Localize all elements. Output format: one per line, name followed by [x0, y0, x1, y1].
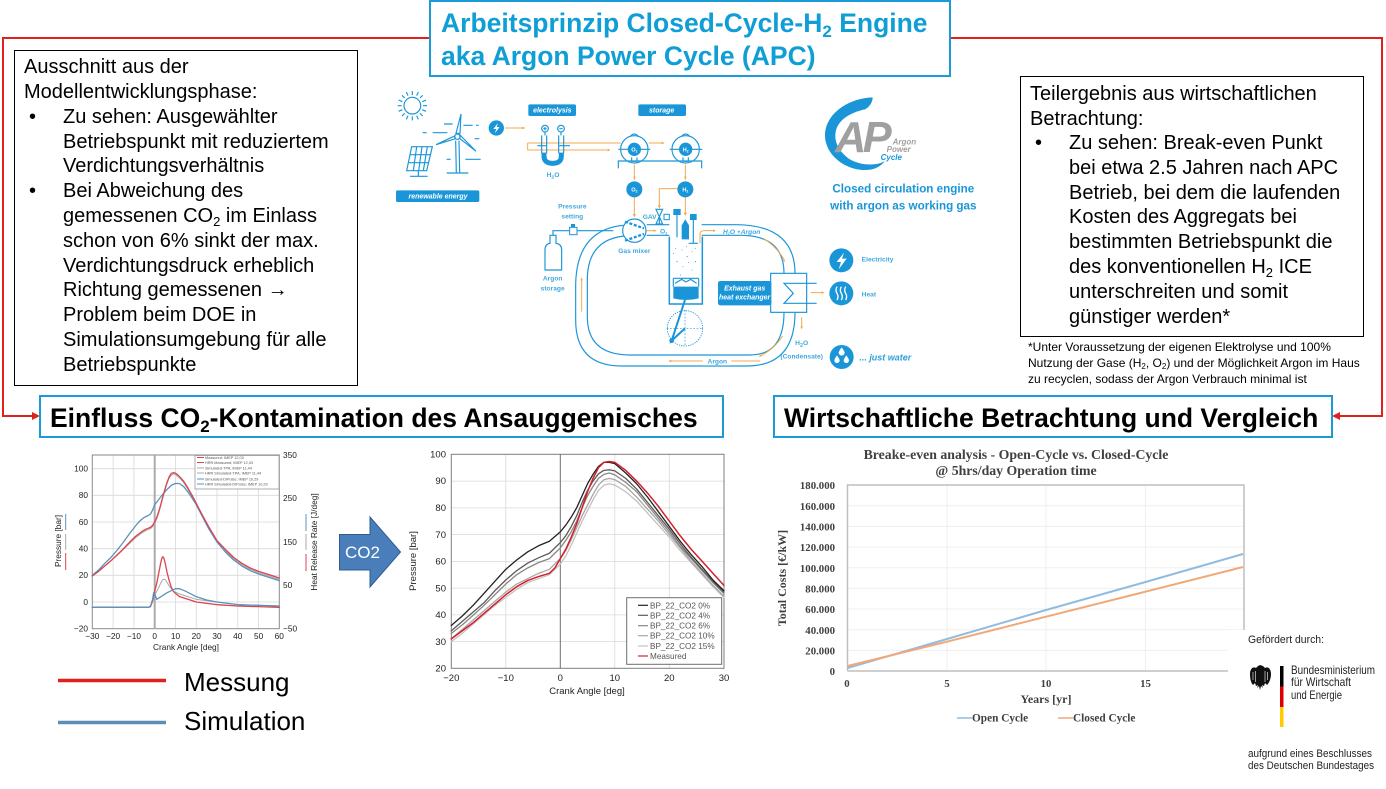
left axis ticks: −20 — [74, 624, 88, 634]
ministry name: und Energie — [1291, 688, 1342, 702]
panel: model development text: Betriebspunkt mit reduziertem — [63, 131, 329, 153]
icon: gas mixer: Gas mixer — [618, 248, 651, 255]
legend: measurement and simulation: Simulation — [184, 706, 305, 736]
y axis ticks: 120.000 — [800, 542, 835, 554]
icon: gas mixer: 2 — [665, 231, 667, 235]
node: H2 supply — [658, 165, 693, 216]
logo: AP Argon Power Cycle — [825, 97, 916, 170]
left axis ticks: 40 — [79, 544, 88, 554]
chart: break-even analysis: @ 5hrs/day Operation time — [935, 463, 1097, 478]
panel: economic result text: ICE — [1273, 256, 1312, 278]
x axis ticks — [844, 678, 1151, 690]
chart legend: BP_22_CO2 15% — [650, 642, 715, 651]
arrow: power to electrolysis — [505, 127, 525, 129]
icon: oxygen tank: O — [631, 147, 636, 153]
heat release curves — [92, 557, 279, 607]
icon: sun — [398, 91, 427, 120]
icon: electricity output — [829, 248, 894, 272]
axis titles — [53, 493, 319, 652]
icon: hydrogen tank — [670, 134, 702, 163]
right axis ticks: 50 — [283, 580, 293, 590]
arrow: CO2: CO2 — [345, 543, 380, 562]
chart: break-even analysis: Breake-even analysis - Open-Cycle vs. Closed-Cycle — [864, 447, 1168, 462]
funding note: aufgrund eines Beschlusses — [1248, 748, 1372, 760]
x axis ticks: 10 — [1041, 678, 1051, 690]
node: H2 supply: 2 — [686, 189, 688, 193]
node: O2 supply — [626, 165, 642, 217]
chart: pressure and heat release vs crank angle — [53, 450, 319, 652]
chart legend: Measured — [650, 652, 687, 661]
x axis ticks: 5 — [944, 678, 950, 690]
label: condensate: (Condensate) — [780, 354, 823, 361]
engine loop pipe — [576, 225, 795, 366]
icon: federal eagle — [1250, 665, 1271, 690]
icon: heat exchanger: heat exchanger — [719, 294, 772, 301]
logo: AP Argon Power Cycle: Power — [887, 145, 912, 154]
icon: gas mixer: O — [660, 228, 665, 235]
panel: model development text: Richtung gemessenen → — [63, 279, 288, 301]
label: H2O + Argon: H — [723, 229, 728, 236]
footnote — [1028, 340, 1360, 386]
panel: model development text: Verdichtungsdruck erheblich — [63, 255, 314, 277]
footnote: 2 — [1162, 362, 1167, 371]
label: Argon — [703, 357, 731, 365]
panel: model development text: Bei Abweichung des — [63, 180, 243, 202]
x axis ticks: 10 — [610, 673, 620, 684]
icon: argon bottle: Argon — [543, 276, 562, 283]
arrow: red connector right — [950, 38, 1382, 420]
y axis ticks: 80.000 — [805, 584, 835, 596]
panel: economic result text: bestimmten Betriebspunkt die — [1069, 231, 1332, 253]
icon: heat exchanger — [718, 273, 817, 312]
icon: water output: ... just water — [859, 353, 912, 363]
axis titles — [775, 530, 1071, 706]
label: pressure setting: Pressure — [558, 204, 587, 211]
x axis ticks: −30 — [85, 631, 100, 641]
x axis ticks: −20 — [443, 673, 459, 684]
left axis ticks: 80 — [79, 490, 88, 500]
x axis ticks: 40 — [233, 631, 243, 641]
y axis ticks — [800, 480, 835, 678]
panel: economic result text — [1020, 76, 1364, 336]
panel: economic result text: unterschreiten und somit — [1069, 281, 1288, 303]
label: renewable energy: renewable energy — [408, 194, 469, 201]
chart: break-even analysis — [775, 447, 1244, 724]
label: storage — [638, 104, 686, 116]
chart legend: BP_22_CO2 0% — [650, 601, 710, 610]
y axis ticks: 60 — [435, 556, 446, 568]
icon: engine cylinder — [669, 209, 702, 304]
icon: oxygen tank: 2 — [636, 149, 638, 153]
right axis ticks: 150 — [283, 537, 297, 547]
panel: model development text: Problem beim DOE in — [63, 304, 256, 326]
y axis ticks — [430, 450, 446, 674]
icon: oxygen tank — [618, 134, 650, 163]
funding note — [1248, 748, 1374, 772]
panel: model development text: Betriebspunkte — [63, 354, 196, 376]
right axis ticks: 250 — [283, 493, 297, 503]
left axis ticks: 100 — [74, 464, 88, 474]
label: pressure setting: setting — [561, 214, 583, 221]
x axis ticks: 30 — [719, 673, 729, 684]
chart legend: Open Cycle — [972, 712, 1028, 724]
footnote: Nutzung der Gase (H — [1028, 356, 1141, 370]
title: 2 — [822, 22, 832, 41]
chart legend — [957, 712, 1135, 724]
panel: model development text: 2 — [213, 214, 220, 229]
funded by: Gefördert durch: — [1248, 634, 1324, 646]
x axis ticks: 0 — [152, 631, 157, 641]
panel: economic result text: Betrieb, bei dem die laufenden — [1069, 182, 1340, 204]
footnote: zu recyclen, sodass der Argon Verbrauch minimal ist — [1028, 372, 1307, 386]
heading: CO2 contamination — [40, 396, 723, 437]
y axis ticks: 20.000 — [805, 646, 835, 658]
heading: economic comparison: Wirtschaftliche Betrachtung und Vergleich — [784, 403, 1318, 433]
y axis ticks: 30 — [435, 637, 446, 648]
logo: AP Argon Power Cycle: Cycle — [881, 153, 903, 162]
chart legend: BP_22_CO2 4% — [650, 611, 710, 620]
y axis ticks: 40.000 — [805, 625, 835, 637]
panel: economic result text: bei etwa 2.5 Jahren nach APC — [1069, 157, 1338, 179]
footnote: *Unter Voraussetzung der eigenen Elektrolyse und 100% — [1028, 340, 1331, 354]
icon: gas mixer — [618, 219, 667, 255]
panel: economic result text: des konventionellen H — [1069, 256, 1266, 278]
right axis ticks: −50 — [283, 624, 297, 634]
x axis ticks: 20 — [192, 631, 201, 641]
x axis ticks: −10 — [498, 673, 514, 684]
node: O2 supply: 2 — [636, 189, 638, 193]
caption: closed circulation — [829, 183, 977, 212]
label: condensate: O — [803, 340, 808, 347]
x axis ticks: −20 — [106, 631, 121, 641]
arrows: gases to storage — [528, 142, 665, 151]
label: H2O + Argon: O +Argon — [730, 229, 760, 236]
x axis ticks: −10 — [127, 631, 141, 641]
cost lines — [848, 554, 1243, 668]
ministry name: für Wirtschaft — [1291, 675, 1352, 689]
panel: model development text: • — [29, 180, 36, 202]
icon: water output — [830, 345, 912, 369]
label: storage: storage — [649, 108, 674, 115]
chart legend: BP_22_CO2 6% — [650, 622, 710, 631]
title: aka Argon Power Cycle (APC) — [441, 41, 816, 71]
arrow: heat out — [800, 291, 825, 329]
x axis ticks: 10 — [171, 631, 180, 641]
left axis ticks: 0 — [83, 597, 88, 607]
y axis ticks: 140.000 — [800, 522, 835, 534]
y axis ticks: 80 — [435, 503, 446, 514]
icon: electrolysis tube: H — [547, 172, 551, 179]
diagram: argon power cycle schematic — [396, 91, 977, 369]
icon: hydrogen tank: H — [683, 147, 687, 153]
x axis ticks: 0 — [844, 678, 850, 690]
heading: CO2 contamination: 2 — [200, 417, 210, 436]
arrows: flow direction — [580, 229, 785, 362]
chart legend: Measured; IMEP 12,03 — [205, 456, 244, 460]
panel: model development text: Modellentwicklungsphase: — [24, 81, 257, 103]
chart legend: BP_22_CO2 10% — [650, 632, 715, 641]
panel: model development text: Ausschnitt aus der — [24, 56, 189, 78]
y axis ticks: 90 — [435, 476, 446, 487]
icon: argon bottle — [541, 235, 565, 293]
logo: AP Argon Power Cycle: Argon — [892, 138, 916, 147]
chart legend: HRR Simulated-TPA; IMEP 11,44 — [205, 472, 261, 476]
right axis ticks — [283, 450, 297, 634]
footnote: , O — [1146, 356, 1162, 370]
icon: electrolysis tube: 2 — [551, 175, 554, 181]
left axis ticks: 60 — [79, 517, 88, 527]
panel: model development text — [14, 50, 358, 386]
chart legend — [627, 598, 722, 664]
panel: economic result text: günstiger werden* — [1069, 306, 1230, 328]
arrow: red connector left — [3, 38, 430, 420]
y axis ticks: 100.000 — [800, 563, 835, 575]
axis titles: Crank Angle [deg] — [549, 686, 625, 697]
y axis ticks: 160.000 — [800, 501, 835, 513]
chart legend: Simulated-TPA; IMEP 11,44 — [205, 466, 252, 470]
icon: heat output — [829, 281, 877, 305]
funding note: des Deutschen Bundestages — [1248, 760, 1374, 772]
panel: economic result text: • — [1035, 132, 1042, 154]
caption: closed circulation: Closed circulation engine — [832, 183, 975, 196]
chart legend: Simulated-DIPulse; IMEP 10,29 — [205, 478, 258, 482]
icon: electrolysis tube: O — [554, 172, 559, 179]
x axis ticks: 15 — [1140, 678, 1151, 690]
panel: model development text: im Einlass — [220, 205, 317, 227]
chart legend: HRR Measured; IMEP 12,03 — [205, 461, 253, 465]
x axis ticks: 20 — [664, 673, 675, 684]
icon: electrolysis tube — [537, 125, 570, 181]
panel: economic result text: 2 — [1266, 265, 1273, 280]
icon: electricity output: Electricity — [862, 257, 894, 264]
tank rack — [618, 161, 702, 168]
node: H2 supply: H — [682, 187, 686, 193]
pressure curves — [92, 473, 279, 581]
title — [430, 1, 950, 76]
chart legend: HRR Simulated-DIPulse; IMEP 10,29 — [205, 482, 268, 486]
icon: gas admission valve — [643, 209, 669, 235]
label: electrolysis — [528, 104, 576, 116]
panel: model development text: gemessenen CO — [63, 205, 213, 227]
arrow: CO2 — [340, 517, 400, 587]
panel: economic result text: Betrachtung: — [1030, 108, 1143, 130]
footnote: 2 — [1141, 362, 1146, 371]
icon: wind turbine — [423, 114, 481, 173]
axis titles: Pressure [bar] — [408, 531, 419, 591]
x axis ticks: 60 — [275, 631, 284, 641]
chart: pressure vs CO2 contamination — [408, 450, 729, 697]
icon: pressure regulator and pipe — [553, 224, 613, 235]
label: condensate: 2 — [800, 343, 803, 349]
legend: measurement and simulation — [58, 667, 305, 736]
label: pressure setting — [558, 204, 587, 221]
label: electrolysis: electrolysis — [533, 108, 572, 115]
label: Argon: Argon — [708, 358, 727, 365]
y axis ticks: 40 — [435, 610, 446, 621]
axis titles: Years [yr] — [1021, 692, 1071, 706]
panel: economic result text: Kosten des Aggregats bei — [1069, 206, 1297, 228]
title: Engine — [832, 8, 928, 38]
heading: CO2 contamination: -Kontamination des Ansauggemisches — [210, 403, 698, 433]
y axis ticks: 100 — [430, 450, 446, 460]
axis titles: Total Costs [€/kW] — [775, 530, 789, 626]
chart legend — [195, 456, 279, 489]
label: renewable energy — [396, 190, 479, 202]
ministry name — [1291, 663, 1375, 702]
x axis ticks — [85, 631, 284, 641]
panel: model development text: Verdichtungsverhältnis — [63, 155, 264, 177]
footnote: ) und der Möglichkeit Argon im Haus — [1166, 356, 1360, 370]
panel: economic result text: Teilergebnis aus wirtschaftlichen — [1030, 83, 1317, 105]
right axis ticks: 350 — [283, 450, 297, 460]
y axis ticks: 0 — [830, 666, 835, 678]
node: O2 supply: O — [631, 187, 636, 193]
label: condensate — [780, 340, 823, 361]
panel: model development text: Simulationsumgebung für alle — [63, 329, 326, 351]
x axis ticks: 50 — [254, 631, 264, 641]
icon: solar panel — [407, 147, 432, 176]
label: condensate: H — [795, 340, 800, 347]
y axis ticks: 20 — [435, 664, 446, 674]
flag bar — [1280, 666, 1284, 727]
x axis ticks — [443, 673, 729, 684]
x axis ticks: 30 — [212, 631, 222, 641]
left axis ticks — [74, 464, 88, 634]
panel: model development text: Zu sehen: Ausgewählter — [63, 106, 278, 128]
axis titles: Heat Release Rate [J/deg] — [309, 493, 319, 591]
logo: AP Argon Power Cycle: AP — [834, 114, 892, 162]
icon: heat exchanger: Exhaust gas — [724, 286, 765, 293]
icon: electricity bolt — [489, 120, 504, 136]
y axis ticks: 70 — [435, 530, 446, 541]
y axis ticks: 180.000 — [800, 480, 835, 492]
left axis ticks: 20 — [79, 570, 88, 580]
axis titles: Crank Angle [deg] — [153, 642, 219, 652]
chart legend: Closed Cycle — [1073, 712, 1135, 724]
axis colour keys — [66, 514, 306, 571]
panel: model development text: schon von 6% sinkt der max. — [63, 230, 319, 252]
label: H2O + Argon: 2 — [727, 232, 730, 236]
y axis ticks: 50 — [435, 584, 446, 594]
icon: hydrogen tank: 2 — [687, 149, 689, 153]
axis titles: Pressure [bar] — [53, 515, 63, 567]
icon: gas admission valve: GAV — [643, 214, 657, 221]
y axis ticks: 60.000 — [805, 604, 835, 616]
icon: crankshaft — [667, 300, 703, 347]
axis titles — [408, 531, 625, 697]
funding logo: BMWi — [1228, 613, 1386, 789]
x axis ticks: 0 — [558, 673, 563, 684]
title: Arbeitsprinzip Closed-Cycle-H — [441, 8, 822, 38]
icon: heat output: Heat — [862, 291, 877, 298]
heading: CO2 contamination: Einfluss CO — [50, 403, 200, 433]
panel: model development text: • — [29, 106, 36, 128]
legend: measurement and simulation: Messung — [184, 667, 290, 697]
CO2 pressure curves — [451, 462, 724, 642]
panel: economic result text: Zu sehen: Break-even Punkt — [1069, 132, 1323, 154]
icon: argon bottle: storage — [541, 286, 565, 293]
caption: closed circulation: with argon as working gas — [829, 199, 977, 212]
